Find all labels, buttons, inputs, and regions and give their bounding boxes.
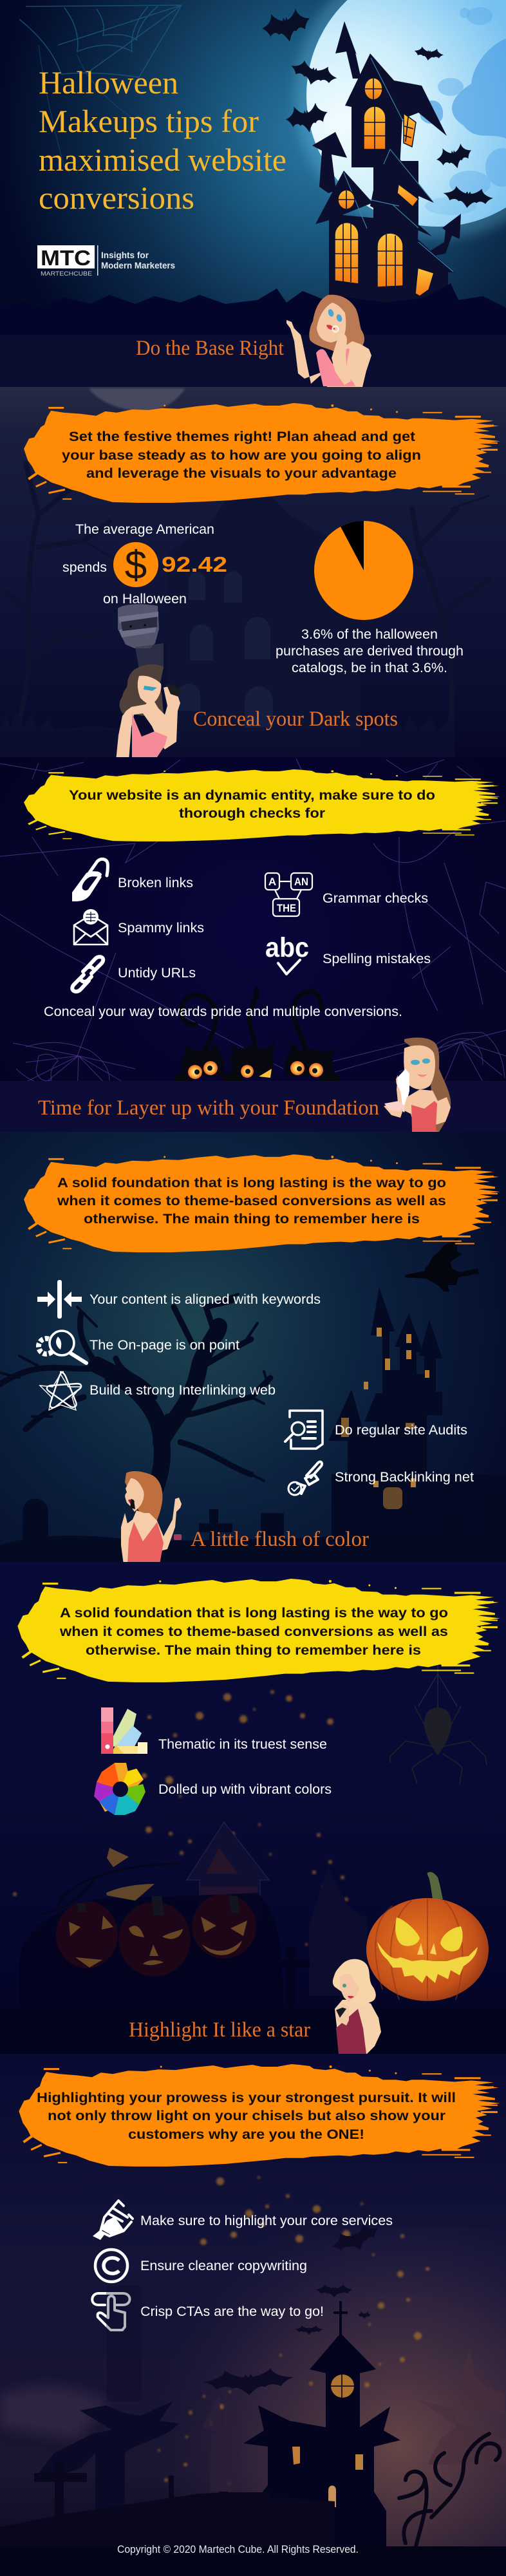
highlight text: not only throw light on your chisels but also show your [48, 2109, 445, 2123]
dark church [243, 2301, 400, 2550]
title: conversions [39, 180, 194, 216]
icon: interlinked star [40, 1372, 81, 1410]
item: aligned [37, 1280, 321, 1319]
foundation text: when it comes to theme-based conversions as well as [57, 1194, 446, 1208]
icon: gear and magnifier [39, 1331, 86, 1363]
color text [59, 1606, 448, 1658]
icon: align arrows [37, 1280, 82, 1319]
check: spammy links: Spammy links [118, 921, 204, 935]
title: Halloween [39, 64, 178, 100]
stat: average spend [62, 522, 227, 606]
item: backlinking: Strong Backlinking net [335, 1470, 474, 1485]
icon: chain link [72, 957, 103, 992]
check: broken links [72, 859, 193, 901]
logo: MARTECHCUBE [41, 270, 92, 277]
heading: foundation: Time for Layer up with your Foundation [38, 1096, 379, 1120]
jack-o-lantern [366, 1872, 489, 2001]
item: thematic: Thematic in its truest sense [158, 1737, 327, 1752]
background: section 5 [0, 1562, 506, 2054]
logo: MTC [41, 246, 91, 270]
item: aligned: Your content is aligned with keywords [89, 1292, 321, 1307]
stat: average spend: The average American [75, 522, 214, 537]
stat: average spend: on Halloween [103, 592, 187, 606]
check: grammar: Grammar checks [323, 891, 428, 906]
item: cta: Crisp CTAs are the way to go! [140, 2304, 324, 2319]
bats over moon [259, 6, 494, 211]
stat: catalog text: purchases are derived through [276, 644, 464, 659]
stat: catalog text: catalogs, be in that 3.6%. [292, 661, 447, 675]
embers lower [158, 2176, 429, 2499]
orange brush: highlight [19, 2064, 500, 2167]
mummy ghost [118, 604, 164, 669]
stat: catalog text: 3.6% of the halloween [301, 627, 438, 642]
background: section 2 [0, 387, 506, 758]
background: section 6 [0, 2054, 506, 2576]
spider [390, 1706, 487, 1785]
scarecrow right [418, 2350, 506, 2465]
icon: dollar coin: $ [125, 543, 147, 588]
yellow brush: checks [24, 769, 500, 841]
item: audits: Do regular site Audits [335, 1423, 467, 1438]
item: copyright [95, 2250, 307, 2282]
stat: catalog text [276, 627, 464, 675]
moon reflection smudge [89, 388, 185, 411]
witch on broom [404, 1237, 479, 1292]
woman 2 [116, 664, 180, 770]
check: grammar [265, 873, 428, 916]
intro text: your base steady as to how are you going to align [62, 448, 421, 463]
fence and graves [0, 2461, 335, 2572]
embers [13, 1690, 350, 1983]
item: on-page: The On-page is on point [89, 1338, 239, 1353]
twisted tree right [399, 2434, 500, 2562]
dim pumpkins [0, 1848, 506, 2054]
checks text [69, 788, 435, 821]
item: copyright: Ensure cleaner copywriting [140, 2259, 307, 2273]
stat: average spend: 92.42 [162, 552, 227, 576]
check: broken links: Broken links [118, 876, 193, 890]
item: cta [92, 2293, 324, 2330]
dim bats [203, 2219, 384, 2398]
color text: A solid foundation that is long lasting is the way to go [60, 1606, 448, 1621]
item: interlinking: Build a strong Interlinking web [89, 1383, 276, 1398]
icon: click button [92, 2293, 130, 2330]
black cats [174, 989, 340, 1086]
spider web top left [19, 5, 182, 167]
logo: Modern Marketers [101, 261, 175, 270]
item: thematic [101, 1707, 327, 1754]
item: interlinking [40, 1372, 276, 1410]
icon: audit document [285, 1411, 323, 1449]
heading: flush: A little flush of color [191, 1528, 369, 1551]
graveyard silhouettes [0, 1497, 506, 1565]
check: spammy links [74, 909, 204, 945]
lit windows [335, 78, 434, 296]
color text: otherwise. The main thing to remember here is [86, 1643, 421, 1658]
icon: abc check [265, 932, 309, 974]
item: highlighter [93, 2201, 393, 2240]
moon [295, 0, 506, 238]
logo [37, 245, 175, 277]
dim castle [328, 1288, 506, 1539]
title: Makeups tips for [39, 103, 259, 139]
ground with grass [0, 283, 506, 399]
dead tree [0, 1294, 270, 1542]
spider thread [418, 1644, 457, 1713]
dim haunted house [187, 1822, 367, 1996]
highlight text: Highlighting your prowess is your strongest pursuit. It will [37, 2091, 456, 2105]
foundation text: A solid foundation that is long lasting is the way to go [57, 1176, 446, 1190]
item: vibrant: Dolled up with vibrant colors [158, 1782, 332, 1797]
icon: copyright mark [95, 2250, 127, 2282]
highlight text: customers why are you the ONE! [128, 2127, 364, 2142]
heading: highlight: Highlight It like a star [129, 2018, 310, 2042]
title: maximised website [39, 142, 286, 178]
check: untidy urls: Untidy URLs [118, 966, 196, 981]
intro text [62, 429, 421, 481]
logo: Insights for [101, 250, 149, 260]
stat: average spend: spends [62, 560, 107, 575]
icon: envelope with bug [74, 909, 108, 945]
cobwebs [0, 758, 506, 1095]
foundation text: otherwise. The main thing to remember here is [84, 1212, 420, 1227]
dim trees and house [0, 457, 489, 762]
church windows [292, 2374, 363, 2507]
checks text: Your website is an dynamic entity, make sure to do [69, 788, 435, 803]
item: highlighter: Make sure to highlight your core services [140, 2214, 393, 2228]
icon: a an the [265, 873, 312, 916]
intro text: Set the festive themes right! Plan ahead and get [69, 429, 415, 444]
icon: a an the: A [268, 876, 276, 888]
icon: chain with check [288, 1462, 322, 1495]
dim windmill [202, 2395, 239, 2492]
checks text: thorough checks for [179, 806, 325, 821]
haunted house [312, 21, 461, 303]
check: untidy urls [72, 957, 196, 992]
woman 4 [121, 1471, 182, 1565]
background: section 4 [0, 1132, 506, 1570]
scarecrow left [35, 2286, 179, 2556]
highlight text [37, 2091, 456, 2142]
background: section 3 [0, 757, 506, 1082]
copyright line: Copyright © 2020 Martech Cube. All Rights Reserved. [117, 2543, 359, 2555]
item: on-page [39, 1331, 239, 1363]
color text: when it comes to theme-based conversions as well as [59, 1624, 448, 1639]
item: backlinking [288, 1462, 474, 1495]
intro text: and leverage the visuals to your advantage [86, 466, 397, 481]
foot darkness [0, 2546, 506, 2576]
item: audits [285, 1411, 467, 1449]
ground lower band [0, 335, 506, 390]
foundation text [57, 1176, 446, 1227]
icon: colour fan [101, 1707, 147, 1754]
orange brush: foundation [24, 1154, 500, 1252]
icon: broken chain [72, 859, 108, 901]
icon: abc check: abc [265, 932, 309, 963]
icon: colour gear [94, 1763, 145, 1815]
yellow brush: color [17, 1579, 500, 1682]
icon: highlighter [93, 2201, 133, 2240]
woman 5 [333, 1959, 381, 2054]
icon: a an the: THE [277, 902, 296, 914]
check: spelling [265, 932, 431, 974]
item: vibrant [94, 1763, 332, 1815]
icon: dollar coin [113, 542, 158, 588]
background: hero [0, 0, 506, 399]
check: closing line: Conceal your way towards pride and multiple conversions. [44, 1004, 402, 1019]
pie chart [314, 521, 413, 620]
orange brush: intro [24, 403, 500, 503]
heading: conceal: Conceal your Dark spots [193, 708, 398, 731]
check: spelling: Spelling mistakes [323, 952, 431, 966]
heading: do the base right: Do the Base Right [136, 337, 284, 360]
woman 3 [384, 1038, 451, 1132]
title [39, 64, 286, 216]
icon: a an the: AN [294, 876, 308, 888]
woman 1 [286, 295, 371, 398]
heading band [0, 1081, 506, 1133]
